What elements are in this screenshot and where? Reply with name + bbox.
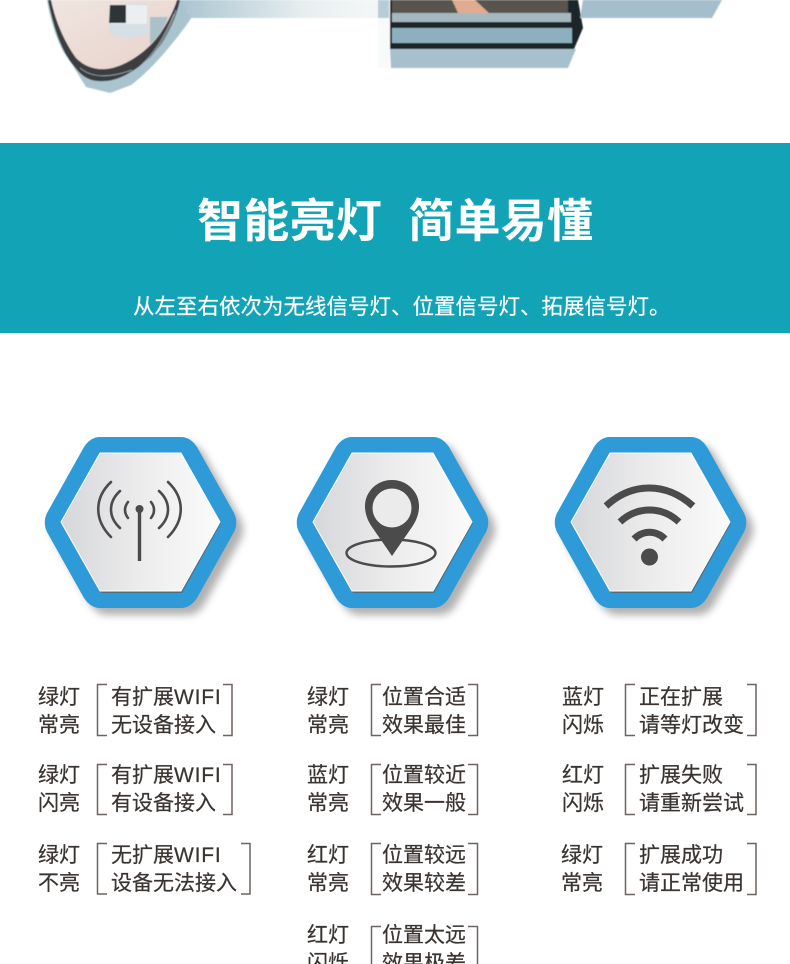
sink unit — [109, 3, 149, 39]
status: green solid, extension succeeded: 扩展成功 — [639, 844, 723, 867]
status: green solid, extender WIFI no devices: 有扩展WIFI — [111, 686, 222, 709]
status: green solid, extension succeeded: 绿灯 — [561, 844, 603, 867]
status: green solid, good position: 位置合适 — [382, 686, 466, 709]
status: blue solid, close position: 常亮 — [307, 792, 349, 815]
status: green off, no extender WIFI: 无扩展WIFI — [111, 844, 222, 867]
status: blue flashing, extending: 蓝灯 — [562, 686, 604, 709]
status: red flashing, too far: 位置太远 — [382, 924, 466, 947]
balcony — [47, 0, 192, 93]
status: red solid, far position: 红灯 — [307, 844, 349, 867]
status: red flashing, extension failed: 红灯 — [562, 764, 604, 787]
status: green solid, extender WIFI no devices: 常亮 — [38, 714, 80, 737]
status: green solid, extension succeeded: 常亮 — [561, 872, 603, 895]
status: blue solid, close position — [307, 764, 478, 815]
status: blue solid, close position: 蓝灯 — [307, 764, 349, 787]
legend column: wireless signal light — [38, 684, 250, 895]
status: green solid, extender WIFI no devices: 绿灯 — [38, 686, 80, 709]
status: red flashing, extension failed: 扩展失败 — [639, 764, 723, 787]
icon: wifi hexagon — [555, 437, 753, 615]
status: green solid, extension succeeded — [561, 844, 756, 895]
status: green off, no extender WIFI: 设备无法接入 — [111, 872, 237, 895]
status: red solid, far position: 常亮 — [307, 872, 349, 895]
status: green flashing, extender WIFI with devices — [38, 764, 232, 815]
status: red solid, far position: 位置较远 — [382, 844, 466, 867]
status: blue solid, close position: 位置较近 — [382, 764, 466, 787]
status: blue flashing, extending: 闪烁 — [562, 714, 604, 737]
building slab left — [180, 0, 378, 18]
status: blue flashing, extending: 正在扩展 — [639, 686, 723, 709]
legend column: position signal light — [307, 684, 478, 964]
status: green solid, extender WIFI no devices — [38, 684, 232, 737]
status: red flashing, extension failed: 请重新尝试 — [639, 792, 744, 815]
status: blue flashing, extending: 请等灯改变 — [639, 714, 744, 737]
status: green solid, good position: 绿灯 — [307, 686, 349, 709]
status: blue solid, close position: 效果一般 — [382, 792, 466, 815]
status: red solid, far position — [307, 844, 478, 895]
building slab right — [580, 0, 722, 18]
building image fragment at top — [47, 0, 722, 93]
status: green off, no extender WIFI — [38, 844, 250, 895]
status: green solid, good position: 常亮 — [307, 714, 349, 737]
central block — [378, 0, 583, 68]
status: red solid, far position: 效果较差 — [382, 872, 466, 895]
status: green solid, good position — [307, 684, 478, 737]
icon: antenna signal hexagon — [45, 437, 243, 615]
status: red flashing, extension failed — [562, 764, 756, 815]
status: blue flashing, extending — [562, 684, 756, 737]
status: green solid, extender WIFI no devices: 无设备接入 — [111, 714, 216, 737]
teal floor beside sink — [150, 17, 168, 44]
status: red flashing, too far: 红灯 — [307, 924, 349, 947]
status: red flashing, extension failed: 闪烁 — [562, 792, 604, 815]
title: 智能亮灯 简单易懂 — [197, 195, 593, 247]
status: green flashing, extender WIFI with devices: 有扩展WIFI — [111, 764, 222, 787]
legend column: extender signal light — [561, 684, 756, 895]
status: red flashing, too far — [307, 924, 478, 964]
banner background — [0, 143, 790, 333]
subtitle: 从左至右依次为无线信号灯、位置信号灯、拓展信号灯。 — [133, 295, 671, 319]
status: green off, no extender WIFI: 绿灯 — [38, 844, 80, 867]
status: green off, no extender WIFI: 不亮 — [38, 872, 80, 895]
status: green solid, good position: 效果最佳 — [382, 714, 466, 737]
icon: location pin hexagon — [297, 437, 495, 615]
railing curves — [80, 10, 176, 76]
status: green flashing, extender WIFI with devices: 闪亮 — [38, 792, 80, 815]
status: green flashing, extender WIFI with devices: 绿灯 — [38, 764, 80, 787]
status: green flashing, extender WIFI with devices: 有设备接入 — [111, 792, 216, 815]
status: green solid, extension succeeded: 请正常使用 — [639, 872, 744, 895]
